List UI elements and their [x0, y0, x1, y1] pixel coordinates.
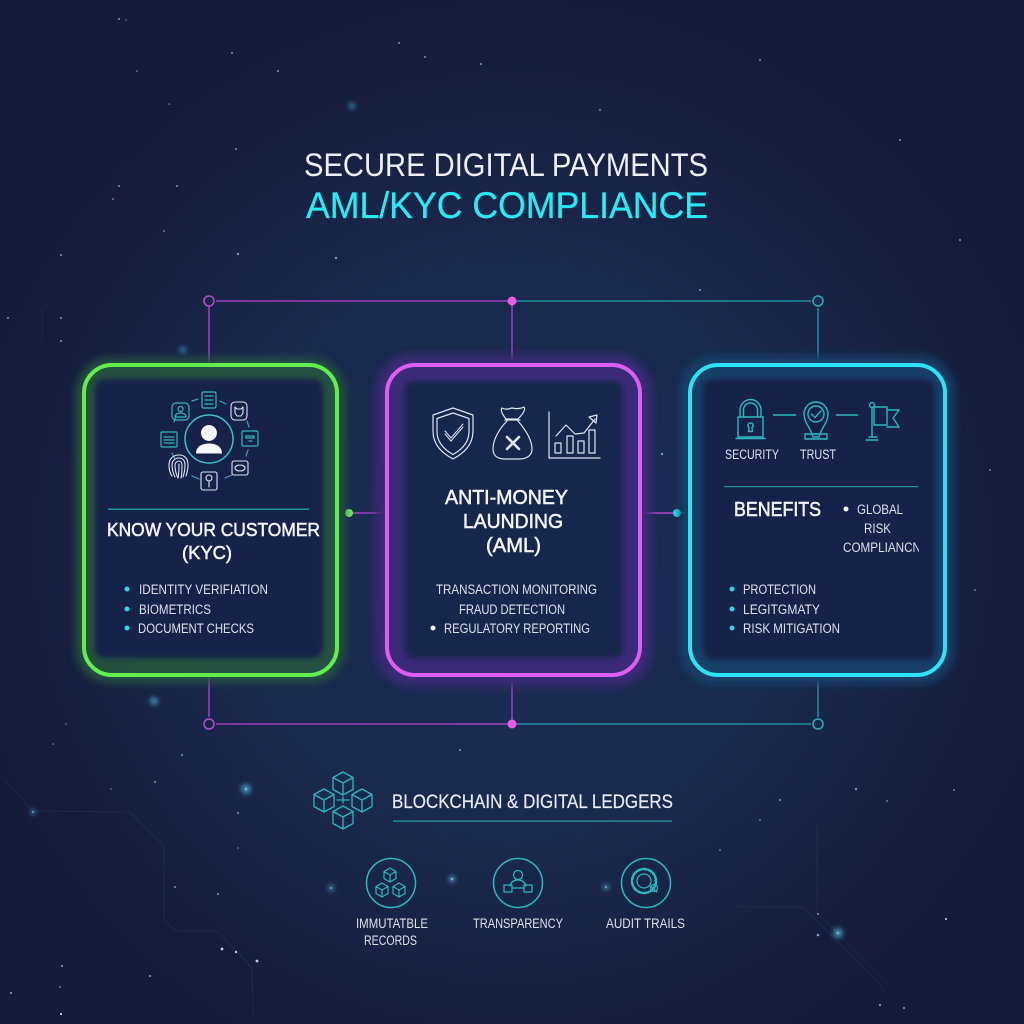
- heading: KYC: KNOW YOUR CUSTOMER: [107, 519, 320, 540]
- list: KYC: BIOMETRICS: [139, 602, 211, 617]
- icon: KYC identity ring: [161, 392, 258, 490]
- item: immutable records: IMMUTATBLE: [356, 916, 428, 931]
- icon: growth chart: [549, 412, 600, 458]
- list: AML: TRANSACTION MONITORING: [436, 582, 597, 597]
- icon: fingerprint: [169, 455, 188, 478]
- heading: blockchain: BLOCKCHAIN & DIGITAL LEDGERS: [392, 792, 673, 813]
- list: AML: REGULATORY REPORTING: [444, 621, 590, 636]
- item: transparency: TRANSPARENCY: [473, 916, 563, 931]
- heading: AML: (AML): [486, 535, 541, 557]
- icon: trust badge: [804, 402, 828, 439]
- list: benefits: [730, 582, 840, 636]
- panel: Benefits: [680, 356, 954, 684]
- icon: user badge: [172, 403, 189, 420]
- list: benefits: LEGITGMATY: [743, 602, 820, 617]
- heading: AML: [445, 487, 568, 557]
- item: audit trails: [606, 858, 685, 931]
- icon: link line: [773, 414, 796, 416]
- list: AML: FRAUD DETECTION: [459, 602, 565, 617]
- item: audit trails: AUDIT TRAILS: [606, 916, 685, 931]
- icon: face scan: [231, 402, 247, 420]
- list: KYC: [124, 582, 268, 636]
- heading: AML: LAUNDING: [463, 511, 563, 533]
- divider: [393, 820, 672, 822]
- icon: money bag: [493, 407, 532, 459]
- divider: [724, 486, 918, 487]
- heading: Benefits: BENEFITS: [734, 499, 821, 521]
- heading: AML: ANTI-MONEY: [445, 487, 568, 509]
- list: global risk compliance: RISK: [864, 521, 891, 536]
- icon: flag: [866, 402, 899, 440]
- connector lines: [209, 301, 818, 724]
- heading: KYC: (KYC): [182, 542, 232, 563]
- icon: eye: [232, 461, 248, 475]
- list: benefits: RISK MITIGATION: [743, 621, 840, 636]
- connector nodes: [204, 296, 823, 729]
- list: benefits: PROTECTION: [743, 582, 816, 597]
- panel: AML: [376, 355, 651, 686]
- icon: list card: [161, 432, 177, 447]
- icon: padlock: [736, 400, 765, 438]
- item: transparency: [473, 858, 563, 931]
- list: KYC: IDENTITY VERIFIATION: [139, 582, 268, 597]
- section: blockchain: [314, 772, 685, 948]
- title: [304, 147, 708, 226]
- heading: KYC: [107, 519, 320, 563]
- list: global risk compliance: [844, 504, 919, 552]
- item: immutable records: [356, 858, 428, 948]
- icon: key: [201, 472, 217, 490]
- divider: [108, 508, 309, 510]
- icon: person: [196, 425, 222, 454]
- panel: KYC: [76, 358, 345, 683]
- icon: shield: [433, 408, 473, 459]
- list: global risk compliance: GLOBAL: [857, 502, 903, 517]
- icon: document: [202, 392, 216, 408]
- list: KYC: DOCUMENT CHECKS: [138, 621, 254, 636]
- icon labels: TRUST: [800, 447, 836, 462]
- icon: link line: [836, 414, 858, 416]
- icon labels: [725, 447, 836, 462]
- title: AML/KYC COMPLIANCE: [306, 185, 708, 226]
- icon: cube cluster: [314, 772, 372, 829]
- icon labels: SECURITY: [725, 447, 779, 462]
- title: SECURE DIGITAL PAYMENTS: [304, 147, 708, 183]
- icon: id card: [242, 431, 258, 446]
- list: AML: [430, 582, 597, 636]
- item: immutable records: RECORDS: [364, 933, 417, 948]
- list: global risk compliance: COMPLIANCN: [843, 540, 921, 555]
